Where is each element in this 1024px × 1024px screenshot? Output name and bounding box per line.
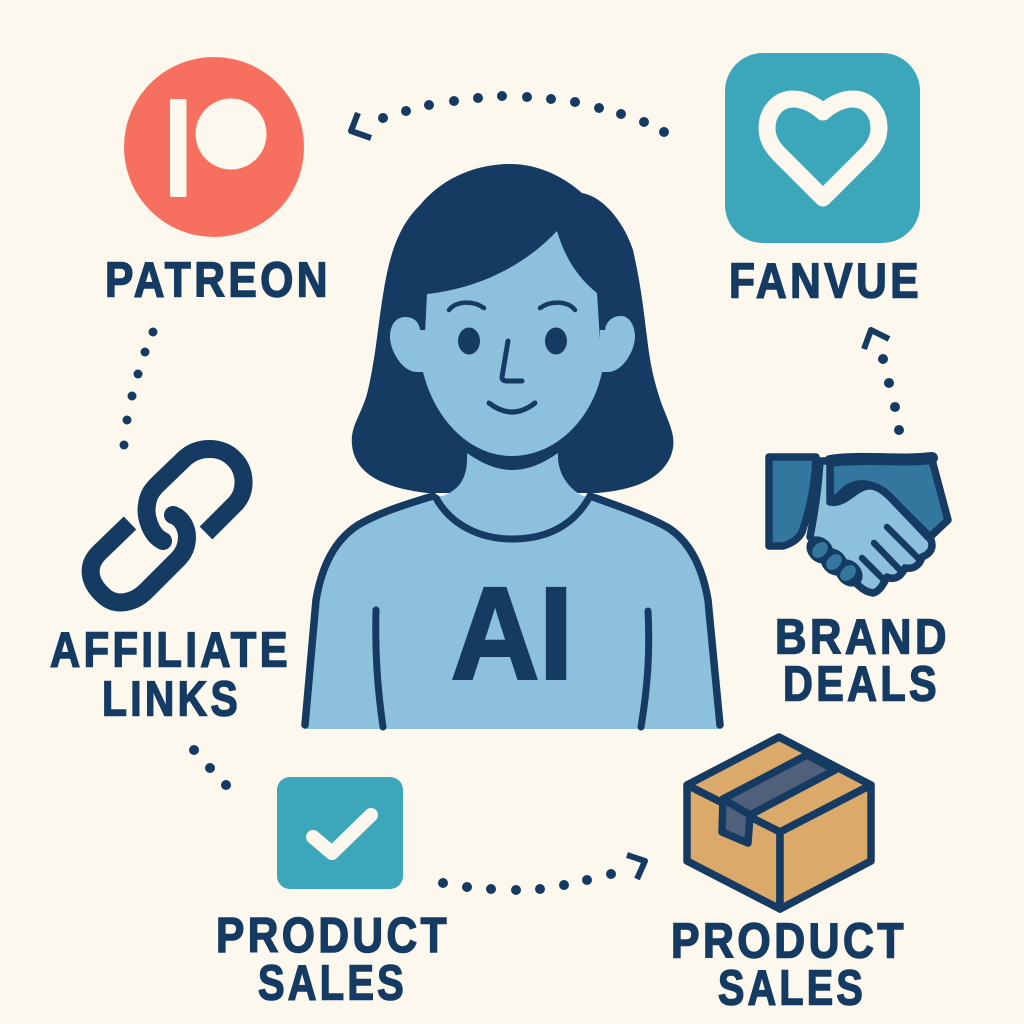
right eyebrow [540,303,575,310]
icon: box [687,737,871,909]
face [423,231,602,456]
left ear [390,317,425,372]
label: Product Sales left [216,909,450,1010]
icon: Fanvue [725,53,920,243]
arrow: Brand Deals to Fanvue [864,330,904,435]
nose [502,341,522,381]
right shoulder outline [590,496,720,725]
right sleeve line [641,611,649,727]
shirt text: AI [451,560,573,706]
arrow: Fanvue to Patreon [351,91,669,138]
label: Brand Deals: BRAND [775,610,950,664]
label: Affiliate Links: AFFILIATE [50,624,291,678]
right ear [600,316,635,372]
icon: chain link [91,449,244,602]
icon: checkbox [277,777,403,889]
hand [810,461,932,593]
label: Product Sales left: PRODUCT [216,909,450,963]
icon: Patreon [124,57,304,237]
arrow: Affiliate to Product Sales [189,745,231,790]
label: Patreon: PATREON [105,254,331,308]
fingers [801,531,868,592]
left eye [458,328,480,354]
shirt [305,496,720,729]
left shoulder outline [305,496,433,725]
label: Product Sales left: SALES [258,956,407,1010]
label: Product Sales right: PRODUCT [671,914,907,968]
cuff [769,457,816,546]
label: Affiliate Links: LINKS [102,672,241,726]
icon: handshake [769,457,948,593]
label: Product Sales right: SALES [718,962,866,1016]
left sleeve line [376,610,383,727]
label: Affiliate Links [50,624,291,726]
label: Brand Deals: DEALS [783,658,940,712]
mouth [489,403,535,412]
right eye [545,328,567,354]
arrow: Product Sales to box [438,855,645,895]
left eyebrow [449,303,484,310]
person: AI influencer [305,164,720,729]
neck [440,453,585,538]
collar [436,498,589,539]
label: Brand Deals [775,610,950,712]
hair [352,164,673,493]
arrow: Patreon to Affiliate [120,328,158,450]
sleeve [830,460,948,537]
label: Fanvue: FANVUE [729,254,922,308]
label: Product Sales right [671,914,907,1016]
